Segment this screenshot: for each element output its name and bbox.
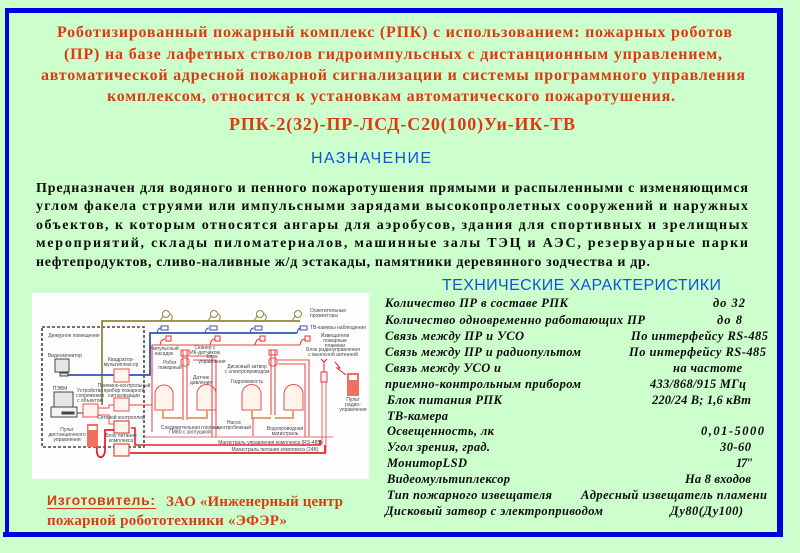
diagram labels: радио- bbox=[345, 402, 361, 408]
specifications table: 30-60 bbox=[719, 440, 752, 454]
specifications table: На 8 входов bbox=[684, 472, 751, 486]
title: Роботизированный пожарный комплекс (РПК) с использованием: пожарных роботов bbox=[57, 24, 732, 41]
manufacturer: Изготовитель: bbox=[47, 492, 155, 508]
specifications table: Связь между УСО и bbox=[385, 361, 501, 375]
diagram labels: пожарные bbox=[323, 338, 347, 344]
control boxes bbox=[83, 369, 129, 456]
diagram labels: Видеомонитор bbox=[48, 353, 82, 359]
specifications table: Связь между ПР и УСО bbox=[385, 329, 524, 343]
diagram labels: ГМ80 с заглушкой bbox=[169, 428, 211, 436]
diagram labels: Импульсный bbox=[149, 345, 179, 352]
diagram labels: Блок bbox=[206, 354, 218, 360]
purpose text: мероприятий, склады пиломатериалов, машинные залы ТЭЦ и АЭС, резервуарные парки bbox=[36, 236, 748, 251]
specifications table: МониторLSD bbox=[386, 456, 467, 470]
diagram labels: Дисковый затвор bbox=[227, 363, 267, 370]
purpose text: Предназначен для водяного и пенного пожаротушения прямыми и распыленными с изменяющимся bbox=[36, 181, 748, 196]
specifications table: Видеомультиплексор bbox=[386, 472, 510, 486]
diagram labels: Магистраль управления комплекса (RS-485) bbox=[218, 440, 322, 446]
diagram labels: Пульт bbox=[60, 427, 74, 433]
diagram labels: сопряжения bbox=[76, 393, 104, 399]
diagram labels: ИК-датчиком bbox=[190, 350, 221, 356]
diagram labels: управления bbox=[53, 437, 81, 443]
diagram labels: Гидроемкость bbox=[231, 379, 264, 385]
diagram labels: ПЭВМ bbox=[53, 386, 67, 392]
diagram labels: Насос bbox=[227, 420, 242, 426]
specifications table: 433/868/915 МГц bbox=[649, 377, 746, 391]
blue camera line bbox=[68, 326, 307, 375]
mains bbox=[97, 359, 346, 457]
olive lighting line bbox=[102, 310, 302, 405]
specifications table: Адресный извещатель пламени bbox=[580, 488, 767, 502]
manufacturer bbox=[47, 492, 343, 529]
product code: РПК-2(32)-ПР-ЛСД-С20(100)Уи-ИК-ТВ bbox=[229, 114, 575, 135]
purpose text bbox=[36, 181, 748, 270]
specifications table: Угол зрения, град. bbox=[387, 440, 490, 454]
diagram labels: пламени bbox=[325, 343, 345, 349]
specifications table: Ду80(Ду100) bbox=[669, 504, 743, 518]
diagram labels: Извещатели bbox=[321, 333, 350, 339]
specifications table: По интерфейсу RS-485 bbox=[630, 329, 768, 343]
diagram labels: прибор пожарной bbox=[104, 387, 145, 394]
manufacturer: пожарной робототехники «ЭФЭР» bbox=[47, 513, 287, 529]
diagram labels: Датчик bbox=[193, 375, 210, 381]
diagram labels: с электроприводом bbox=[225, 369, 270, 375]
heading: purpose: НАЗНАЧЕНИЕ bbox=[311, 150, 431, 167]
specifications table: до 32 bbox=[713, 296, 745, 310]
diagram labels: Соединительная головка bbox=[161, 425, 219, 431]
specifications table: Дисковый затвор с электроприводом bbox=[384, 504, 603, 518]
specifications table: 220/24 В; 1,6 кВт bbox=[651, 393, 751, 407]
specifications table: Тип пожарного извещателя bbox=[387, 488, 553, 502]
specifications table: 17" bbox=[736, 456, 753, 470]
diagram labels: сигнализации bbox=[108, 393, 140, 399]
fire robots bbox=[152, 350, 309, 437]
diagram labels: Пульт bbox=[346, 397, 360, 403]
diagram labels: Робот bbox=[163, 360, 178, 366]
specifications table: По интерфейсу RS-485 bbox=[628, 345, 766, 359]
diagram labels: управления bbox=[339, 407, 367, 413]
diagram labels: магистраль bbox=[272, 431, 299, 437]
remotes bbox=[87, 373, 359, 447]
specifications table: на частоте bbox=[673, 361, 742, 375]
diagram labels bbox=[48, 308, 367, 453]
title bbox=[41, 24, 745, 105]
specifications table: приемно-контрольным прибором bbox=[385, 377, 581, 391]
diagram labels: с объектом bbox=[77, 398, 104, 404]
diagram labels: пожарный bbox=[158, 364, 182, 371]
system diagram panel: Дежурное помещение bbox=[48, 333, 100, 339]
title: комплексом, относится к установкам автоматического пожаротушения. bbox=[107, 88, 675, 105]
diagram labels: комплекса bbox=[109, 438, 133, 444]
manufacturer: ЗАО «Инженерный центр bbox=[166, 494, 343, 510]
specifications table: Освещенность, лк bbox=[387, 424, 495, 438]
red sensor line and tubing bbox=[129, 336, 310, 405]
diagram labels: дистанционного bbox=[48, 432, 86, 438]
dashed control room bbox=[42, 327, 144, 447]
diagram labels: Осветительные bbox=[310, 308, 346, 314]
specifications table: Блок питания РПК bbox=[386, 393, 504, 407]
purpose text: углом факела струями или импульсными зарядами высокопролетных сооружений и наружных bbox=[36, 199, 748, 214]
diagram labels: ТВ-камеры наблюдения bbox=[310, 325, 366, 331]
diagram labels: Устройство bbox=[77, 387, 103, 394]
diagram labels: Приемно-контрольный bbox=[98, 382, 151, 389]
specifications table: Связь между ПР и радиопультом bbox=[385, 345, 581, 359]
diagram labels: мультиплексор bbox=[104, 362, 139, 368]
title: автоматической адресной пожарной сигнализации и системы программного управления bbox=[41, 67, 745, 84]
diagram labels: Сетевой контроллер bbox=[97, 414, 145, 421]
specifications table: ТВ-камера bbox=[387, 409, 448, 423]
purpose text: нефтепродуктов, сливо-наливные ж/д эстакады, памятники деревянного зодчества и др. bbox=[36, 255, 650, 270]
diagram labels: Блок радиоуправления bbox=[306, 347, 360, 353]
diagram labels: Блок питания bbox=[105, 433, 137, 439]
diagram labels: прожекторы bbox=[310, 313, 338, 319]
diagram labels: управления bbox=[198, 359, 226, 365]
tanks bbox=[155, 385, 303, 410]
specifications table bbox=[384, 296, 768, 518]
title: (ПР) на базе лафетных стволов гидроимпульсных с дистанционным управлением, bbox=[64, 46, 722, 63]
computer and monitor bbox=[51, 359, 83, 417]
diagram labels: Квадратор- bbox=[108, 357, 134, 363]
specifications table: Количество одновременно работающих ПР bbox=[384, 313, 645, 327]
purpose text: объектов, к которым относятся ангары для аэробусов, здания для спортивных и зрелищных bbox=[36, 218, 748, 233]
diagram labels: Магистраль питания комплекса (24В) bbox=[231, 447, 319, 453]
heading: specifications: ТЕХНИЧЕСКИЕ ХАРАКТЕРИСТИКИ bbox=[442, 277, 721, 294]
diagram labels: с выносной антенной bbox=[308, 351, 358, 358]
specifications table: 0,01-5000 bbox=[701, 424, 765, 438]
diagram labels: Водопроводная bbox=[267, 426, 303, 432]
diagram labels: насадок bbox=[155, 351, 174, 357]
diagram labels: давления bbox=[190, 380, 212, 386]
diagram labels: Сканер с bbox=[195, 345, 216, 351]
system diagram panel bbox=[32, 293, 369, 479]
specifications table: Количество ПР в составе РПК bbox=[384, 296, 570, 310]
specifications table: до 8 bbox=[717, 313, 743, 327]
diagram labels: центробежный bbox=[217, 424, 251, 431]
